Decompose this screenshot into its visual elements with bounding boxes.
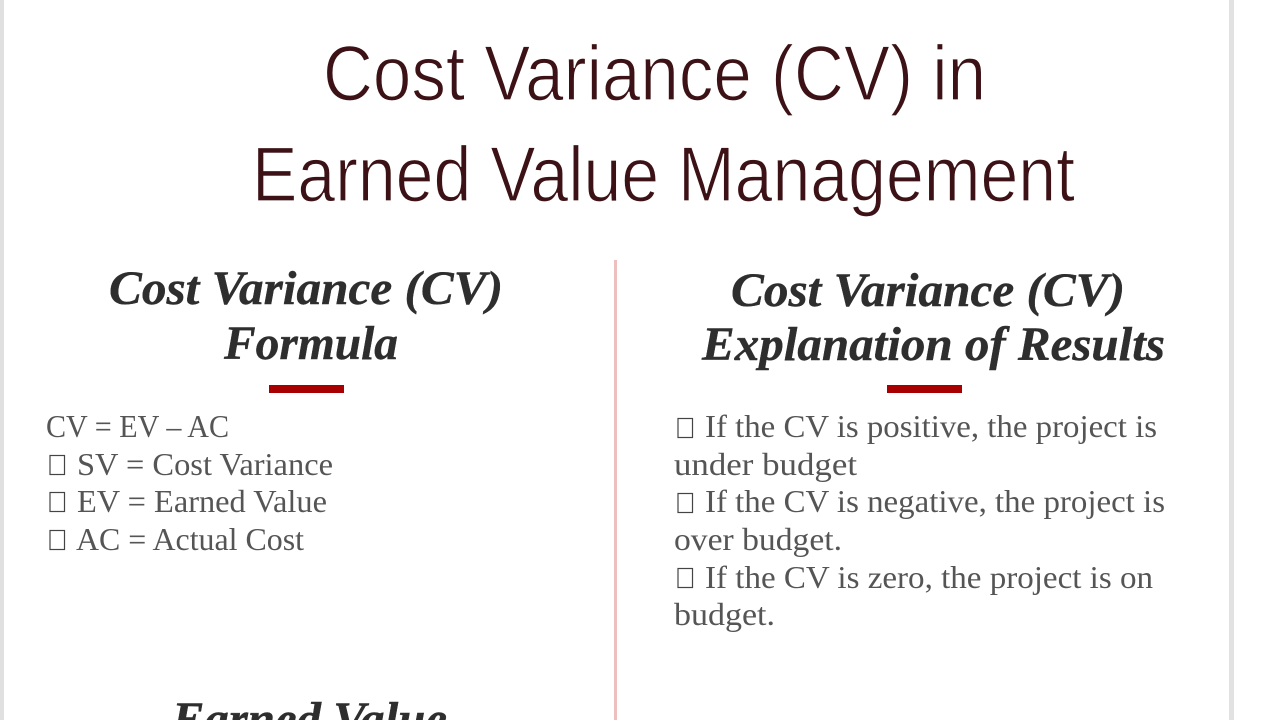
heading: formula: Formula [223, 317, 398, 370]
explanation text block: budget. [674, 596, 775, 632]
heading: explanation: Explanation of Results [701, 318, 1165, 371]
heading: explanation [701, 264, 1165, 371]
formula text block [46, 408, 333, 557]
title [252, 29, 1075, 218]
heading: formula [109, 262, 503, 370]
explanation text block: under budget [674, 446, 857, 482]
formula text block: CV = EV – AC [46, 408, 229, 444]
explanation text block: over budget. [674, 521, 842, 557]
heading accent bar [269, 385, 344, 393]
formula text block: EV = Earned Value [77, 483, 327, 519]
title: Cost Variance (CV) in [323, 29, 986, 117]
heading: formula: Cost Variance (CV) [109, 262, 503, 315]
heading accent bar [887, 385, 962, 393]
explanation text block: If the CV is zero, the project is on [705, 559, 1153, 595]
explanation text block: If the CV is positive, the project is [705, 408, 1157, 444]
title: Earned Value Management [252, 130, 1075, 218]
explanation text block: If the CV is negative, the project is [705, 483, 1165, 519]
heading: explanation: Cost Variance (CV) [731, 264, 1125, 317]
formula text block: AC = Actual Cost [76, 521, 304, 557]
panel: explanation of results [674, 264, 1165, 632]
explanation text block [674, 408, 1165, 632]
panel: formula [46, 262, 503, 557]
formula text block: SV = Cost Variance [77, 446, 333, 482]
